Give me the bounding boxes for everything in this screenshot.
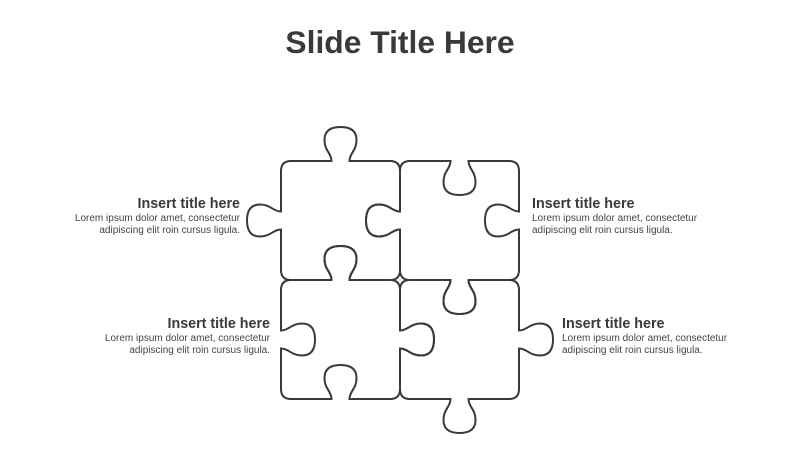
text block: top-right: Insert title here <box>532 196 634 212</box>
text block: bottom-left: Insert title here <box>168 316 270 332</box>
text block: top-left <box>75 196 240 236</box>
text block: top-left: Insert title here <box>138 196 240 212</box>
text block: top-right: adipiscing elit roin cursus ligula. <box>532 225 673 236</box>
piece: bottom-right <box>400 280 553 433</box>
text block: top-right: Lorem ipsum dolor amet, consectetur <box>532 213 697 224</box>
text block: top-right <box>532 196 697 236</box>
text block: bottom-left: adipiscing elit roin cursus ligula. <box>129 345 270 356</box>
piece: top-left <box>247 127 400 280</box>
text block: bottom-right: adipiscing elit roin cursus ligula. <box>562 345 703 356</box>
text block: top-left: Lorem ipsum dolor amet, consectetur <box>75 213 240 224</box>
text block: bottom-right: Insert title here <box>562 316 664 332</box>
text block: bottom-left: Lorem ipsum dolor amet, consectetur <box>105 333 270 344</box>
text block: bottom-right: Lorem ipsum dolor amet, consectetur <box>562 333 727 344</box>
piece: top-right <box>366 161 519 314</box>
text block: bottom-left <box>105 316 270 356</box>
piece: bottom-left <box>281 246 434 399</box>
text block: bottom-right <box>562 316 727 356</box>
text block: top-left: adipiscing elit roin cursus ligula. <box>99 225 240 236</box>
title: Slide Title Here <box>285 24 515 60</box>
